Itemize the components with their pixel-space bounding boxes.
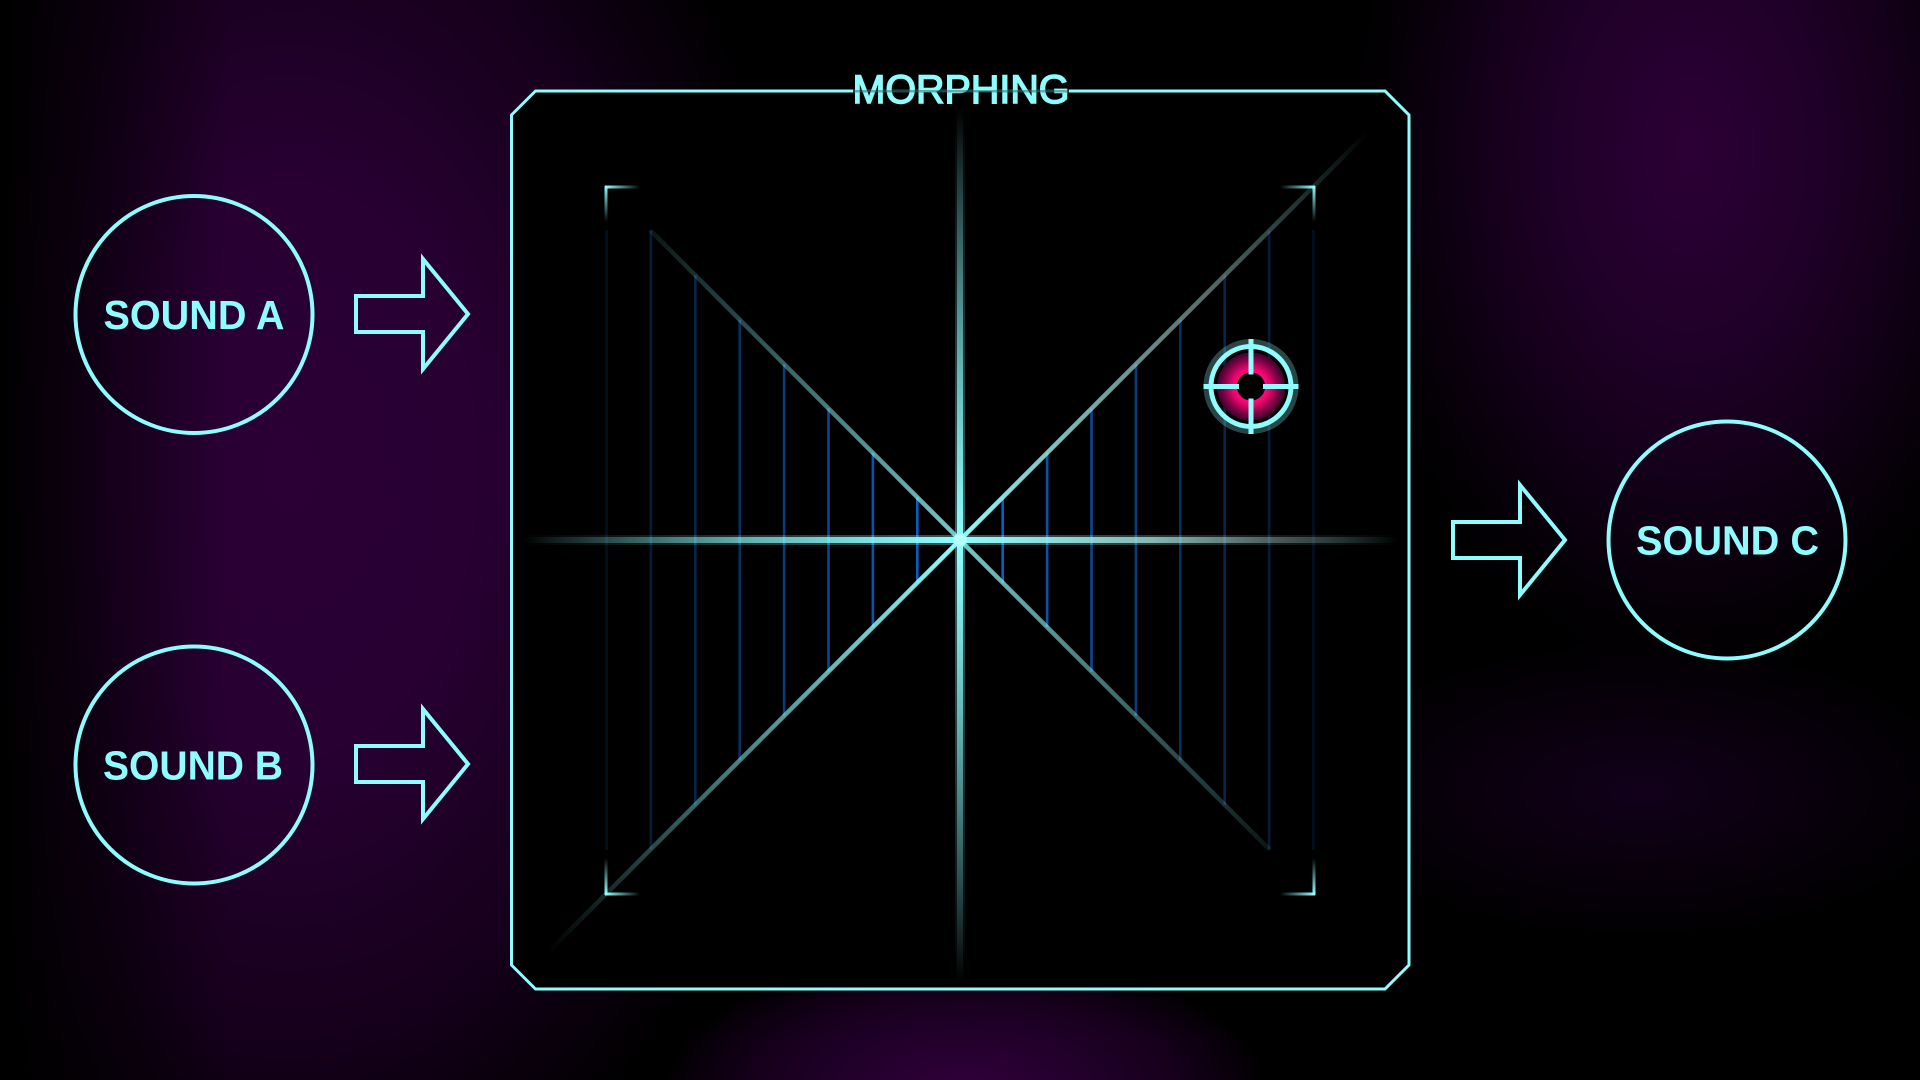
node: sound b <box>76 646 312 884</box>
horizontal axis <box>518 535 1398 545</box>
arrow: sound b to morphing <box>356 709 468 819</box>
arrow: morphing to sound c <box>1453 485 1565 595</box>
diagonal axis: top-left to bottom-right <box>650 230 1270 850</box>
diagonal axis: bottom-left to top-right <box>548 132 1368 952</box>
panel: morphing frame <box>512 91 1409 989</box>
corner brackets <box>605 186 1315 895</box>
title: morphing: MORPHING <box>852 68 1070 112</box>
node: sound a: SOUND A <box>104 292 284 338</box>
node: sound c <box>1608 422 1846 658</box>
center glow <box>954 534 966 546</box>
position cursor <box>1204 339 1298 434</box>
node: sound b: SOUND B <box>103 742 283 788</box>
arrow: sound a to morphing <box>356 259 468 369</box>
vertical axis <box>955 108 965 982</box>
vertical grid lines <box>606 230 1314 850</box>
node: sound a <box>76 196 312 433</box>
node: sound c: SOUND C <box>1636 518 1819 564</box>
